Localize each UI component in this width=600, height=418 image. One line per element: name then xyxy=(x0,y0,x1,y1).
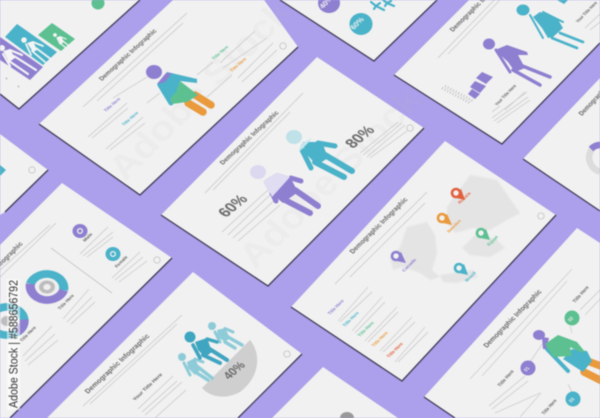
chart fragment: blue block xyxy=(557,0,568,4)
title: Demographic Infographic xyxy=(483,289,544,349)
legend: title items: Title Here xyxy=(357,320,375,338)
legend: title items: Title Here xyxy=(371,330,389,348)
panel: map slide xyxy=(291,141,556,381)
chart fragment xyxy=(0,165,6,176)
icon: female badge xyxy=(106,247,120,261)
chart: 60 percent circle xyxy=(348,13,372,35)
icon: pale purple person xyxy=(250,165,318,213)
labels xyxy=(19,232,129,343)
icon: green badge xyxy=(92,0,104,10)
labels: Female xyxy=(114,254,129,269)
badge: 03 xyxy=(566,392,580,406)
pin: purple Canada: Canada xyxy=(401,257,418,273)
bar: blue xyxy=(5,24,57,65)
legend: title items xyxy=(327,298,404,359)
legend: title items: Title Here xyxy=(342,310,360,328)
label: green: Title Here xyxy=(211,44,230,61)
bar: green xyxy=(38,23,75,51)
silhouette: person in green bar xyxy=(53,33,69,48)
icon: blue person xyxy=(286,130,352,177)
icon: footer badge xyxy=(154,257,160,263)
chart ticks xyxy=(6,78,19,87)
chart: small donut xyxy=(0,301,32,342)
chart: 60 percent circle: 60% xyxy=(348,15,366,31)
stat: 40 percent: 40% xyxy=(221,360,248,382)
icon: pale person left xyxy=(178,353,212,380)
badge: 03: 03 xyxy=(568,397,577,404)
icon: footer badge xyxy=(280,43,286,49)
icon: footer badge xyxy=(538,213,544,219)
pin: orange Sweden: Sweden xyxy=(446,218,463,234)
pin: orange Sweden xyxy=(437,213,463,234)
pin: blue Brazil: Brazil xyxy=(464,271,477,283)
chart: stacked squares xyxy=(468,72,493,99)
panel: 40 percent people slide xyxy=(47,272,302,418)
panel: 60 and 80 percent slide: Adobe Stock xyxy=(230,80,430,275)
pin: red Russia xyxy=(451,188,472,205)
labels: title here: Title Here xyxy=(497,369,516,388)
labels: title here xyxy=(497,285,591,416)
panel: left small slide xyxy=(0,134,48,215)
label: your title here: Your Title Here xyxy=(494,83,518,107)
icon: woman figure xyxy=(146,65,211,112)
pin: red Russia: Russia xyxy=(457,190,472,205)
badge: 02: 02 xyxy=(567,316,576,323)
icon: footer badge xyxy=(29,167,35,173)
icon: woman silhouette xyxy=(516,4,583,48)
legend: title items: Title Here xyxy=(386,341,404,359)
chart: grey half circle xyxy=(202,340,257,397)
label: blue: Title Here xyxy=(121,110,140,127)
icon: grey circle xyxy=(340,412,354,418)
labels: Title Here xyxy=(19,325,38,343)
icon: footer badge xyxy=(284,351,290,357)
icon: dark person center xyxy=(184,332,227,363)
badge: 01: 01 xyxy=(523,366,532,373)
pin: green Egypt xyxy=(476,228,500,247)
labels: title here: Title Here xyxy=(541,398,559,416)
stat: 60 percent: 60% xyxy=(215,192,252,220)
label: orange: Title Here xyxy=(229,56,248,73)
panel: top-right silhouettes slide xyxy=(394,0,600,144)
panel: top circles slide xyxy=(280,0,437,61)
title: Demographic Infographic xyxy=(349,197,410,255)
divider xyxy=(51,248,112,293)
panel: person with numbered circles slide xyxy=(424,228,600,418)
panel: donut charts slide xyxy=(0,183,172,418)
icon: male badge xyxy=(72,224,88,238)
pin: green Egypt: Egypt xyxy=(486,234,500,247)
chart: scale ticks xyxy=(442,86,473,103)
silhouette: person in blue bar xyxy=(21,37,52,62)
pin: purple Canada xyxy=(391,251,418,273)
panel: 60 and 80 percent slide xyxy=(161,57,430,286)
silhouette: person in purple bar xyxy=(0,45,36,74)
panel: bottom center slide xyxy=(272,367,398,418)
icon: footer badge xyxy=(407,125,413,131)
chart: big donut xyxy=(16,261,78,313)
chart: donut arc xyxy=(589,145,600,172)
map: world xyxy=(390,175,520,283)
stat: 80 percent: 80% xyxy=(342,123,379,151)
label: purple: Title Here xyxy=(103,96,122,113)
badge: 02 xyxy=(564,310,580,326)
watermark: adobe stock id: Adobe Stock | #588656792 xyxy=(8,280,20,408)
labels: title here: Title Here xyxy=(572,285,591,304)
icon: small people xyxy=(371,0,394,10)
labels: Male xyxy=(82,232,94,243)
legend: title items: Title Here xyxy=(327,298,345,316)
labels: Title Here xyxy=(57,293,76,311)
title: Demographic Infographic xyxy=(98,28,159,82)
panel: top-left slide with bars xyxy=(0,0,140,109)
icon: pale person right xyxy=(208,322,242,348)
icon: man silhouette xyxy=(483,38,550,85)
title: Demographic Infographic xyxy=(219,110,281,166)
title: Demographic Infographic xyxy=(83,333,152,395)
panel: right slide with grey donut xyxy=(523,78,600,211)
pin: blue Brazil xyxy=(454,263,477,283)
bar: purple xyxy=(0,37,43,80)
label: your title here: Your Title Here xyxy=(132,372,165,402)
chart: 40 percent circle xyxy=(317,0,340,13)
badge: 01 xyxy=(520,360,536,376)
icon: person figure xyxy=(533,330,600,383)
